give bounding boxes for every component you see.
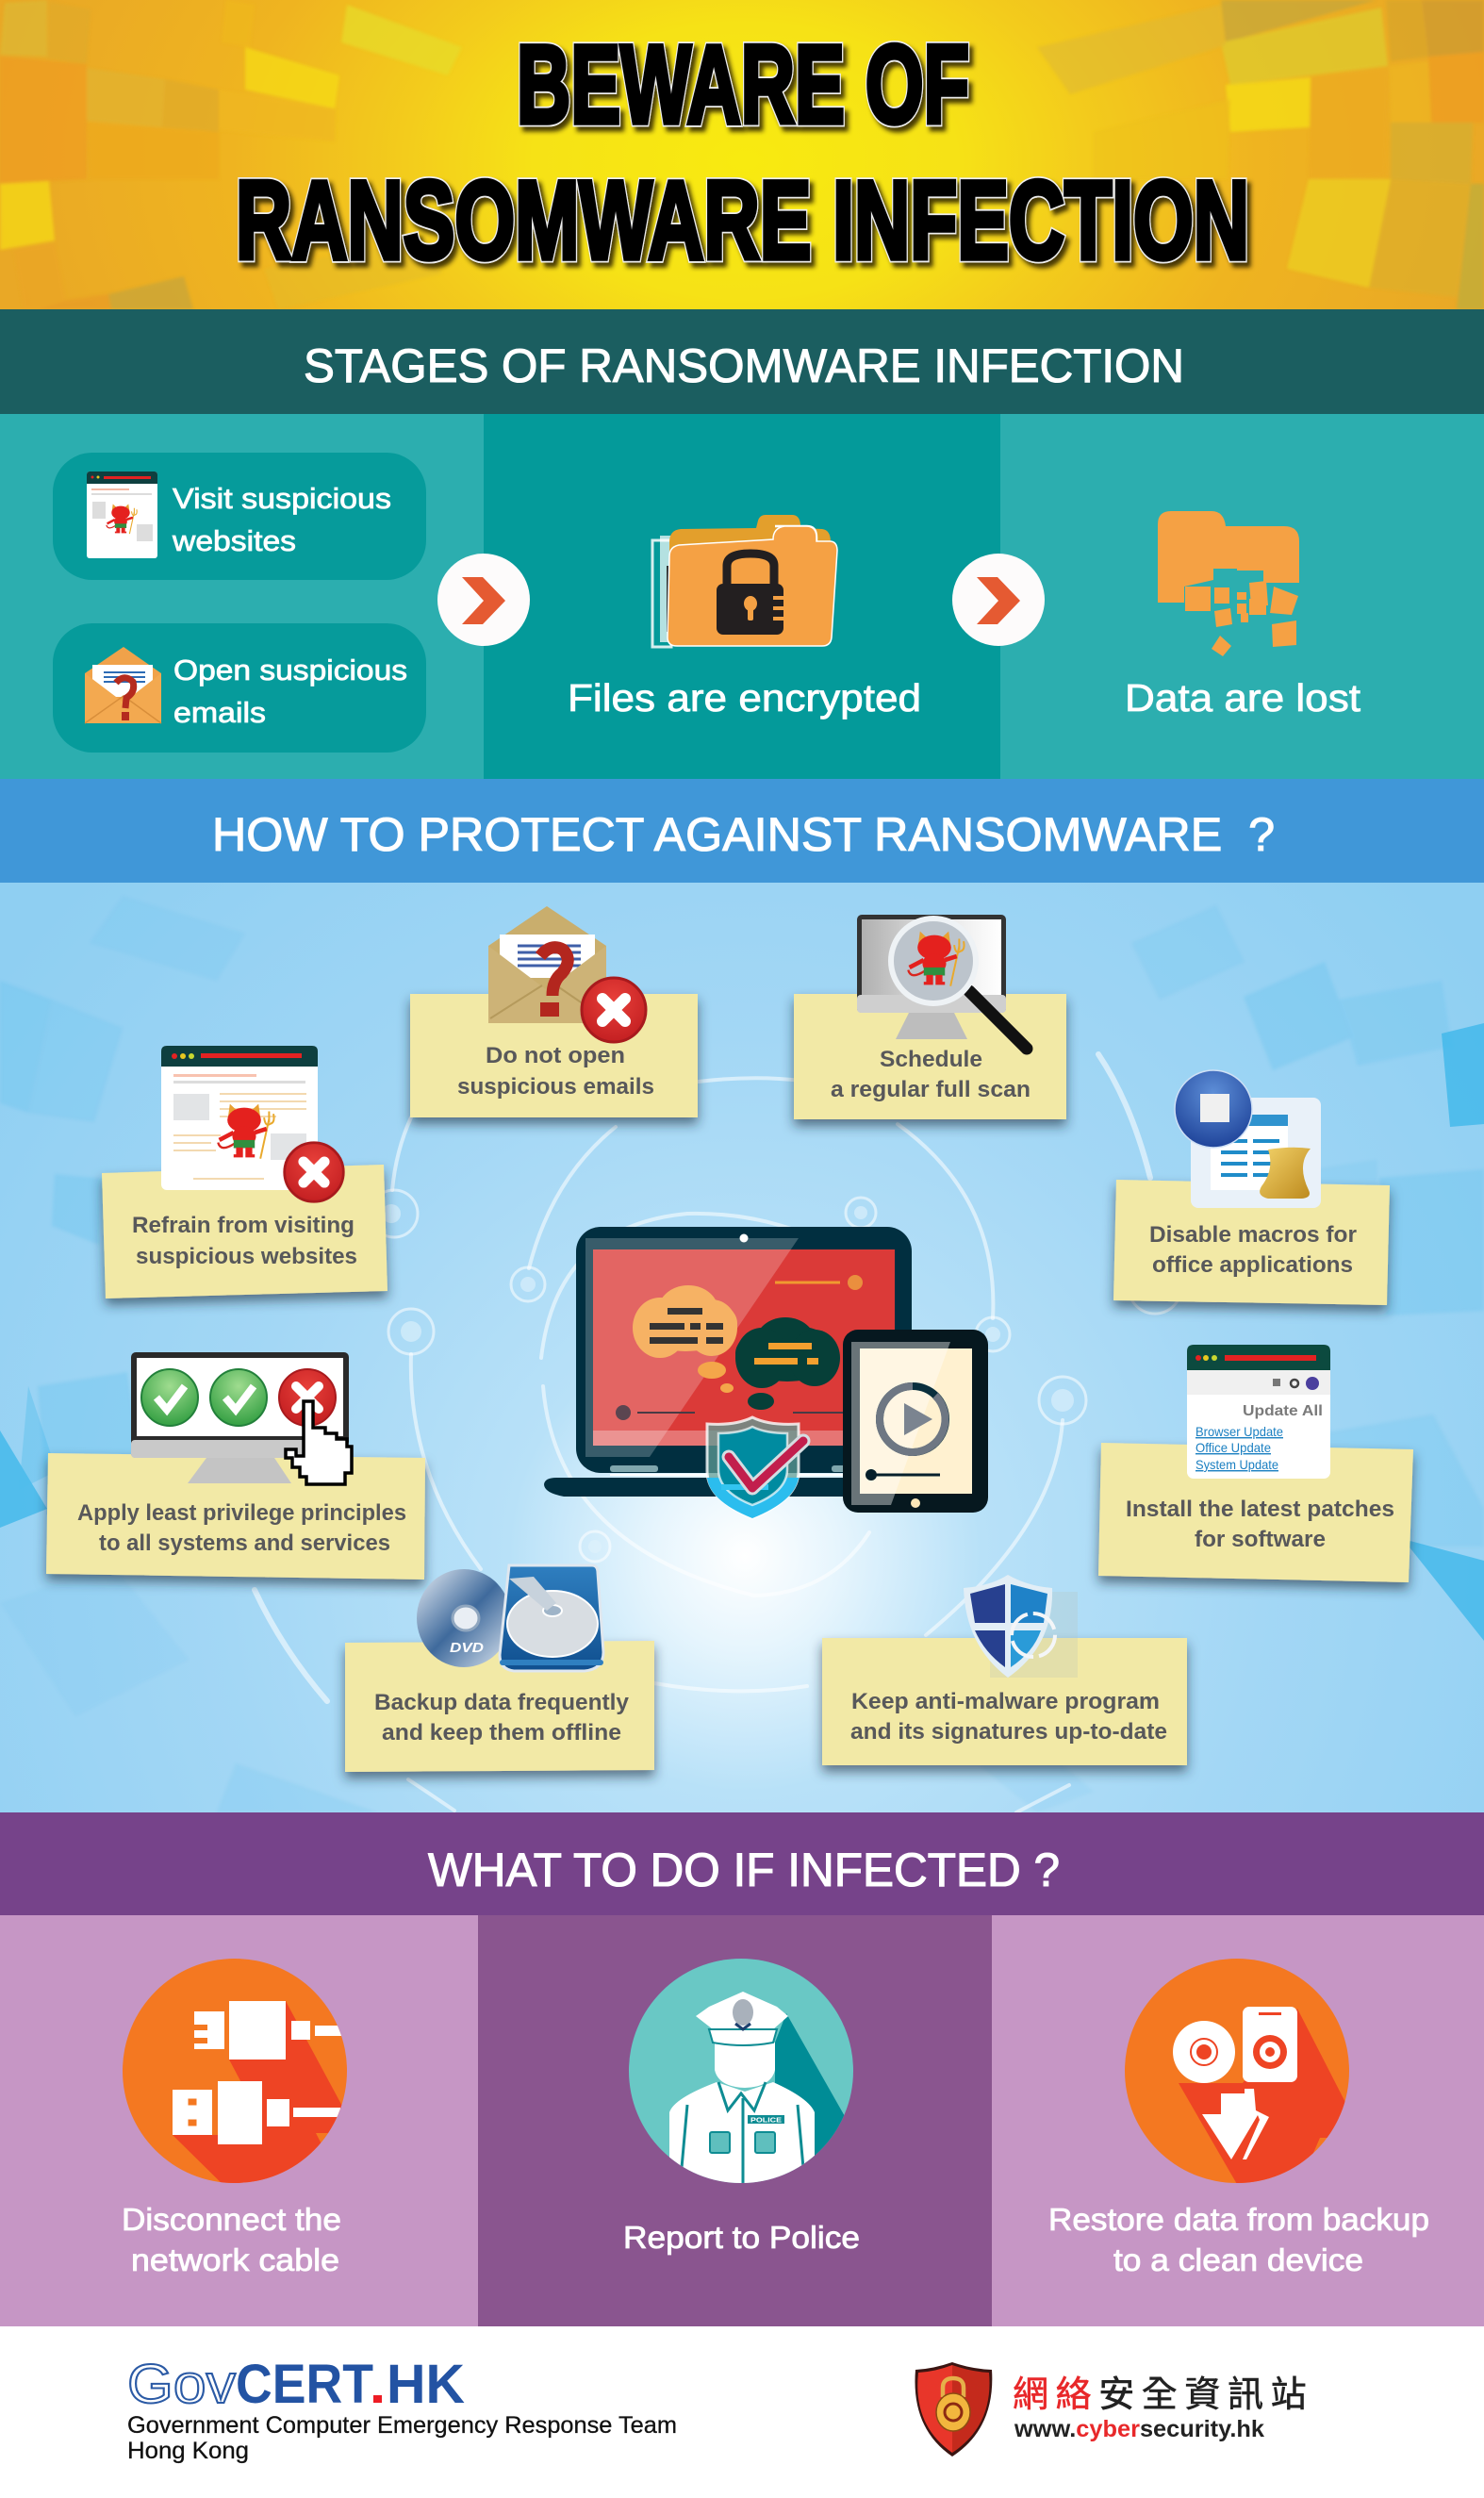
- logo: GovCERT.HK: Gov: [127, 2354, 236, 2415]
- icon: police officer: [629, 1959, 853, 2188]
- icon: restore from backup: [1125, 1959, 1353, 2197]
- card: anti-malware: [822, 1575, 1187, 1765]
- card: anti-malware: Keep anti-malware program: [851, 1689, 1160, 1714]
- icon: update window: Update All: [1243, 1403, 1323, 1419]
- icon: update window: [1187, 1345, 1330, 1479]
- pill: open suspicious emails: Open suspicious: [173, 653, 407, 687]
- icon: encrypted folder: [652, 515, 837, 647]
- icon: shield with refresh: [964, 1575, 1078, 1678]
- laptop: [544, 1227, 912, 1497]
- icon: data lost folder: [1158, 511, 1299, 656]
- label: disconnect: Disconnect the: [122, 2202, 341, 2237]
- arrow: stage 2 to 3: [952, 554, 1045, 646]
- icon: dvd and hard drive: DVD: [450, 1640, 484, 1656]
- icon: update window: Office Update: [1195, 1440, 1271, 1455]
- icon: red shield with lock: [915, 2362, 992, 2457]
- card: backup data: [345, 1565, 654, 1772]
- icon: monitor with magnifier: [857, 915, 1027, 1049]
- title: BEWARE OF: [517, 23, 969, 147]
- logo: GovCERT.HK: HK: [387, 2354, 465, 2415]
- pill: visit suspicious websites: Visit suspicious: [173, 482, 391, 515]
- label: restore data: to a clean device: [1113, 2242, 1363, 2277]
- section heading: protect: [0, 779, 1484, 883]
- card: anti-malware: and its signatures up-to-date: [850, 1719, 1167, 1745]
- card: do not open suspicious emails: [410, 906, 698, 1117]
- label: report to police: Report to Police: [623, 2220, 860, 2255]
- footer: GovCERT logo and text: [127, 2354, 677, 2464]
- icon: police officer: POLICE: [750, 2118, 782, 2124]
- section heading: stages: STAGES OF RANSOMWARE INFECTION: [304, 339, 1184, 392]
- footer: cybersecurity.hk logo: www.cybersecurity.hk: [1014, 2416, 1264, 2442]
- panel: protection background: [0, 883, 1484, 1812]
- card: apply least privilege: to all systems and services: [99, 1530, 390, 1556]
- panel: what to do if infected: [0, 1915, 1484, 2326]
- pill: visit suspicious websites: [53, 453, 426, 580]
- card: schedule a regular full scan: a regular full scan: [831, 1077, 1031, 1102]
- arrow: stage 1 to 2: [437, 554, 530, 646]
- icon: disconnect cable: [123, 1959, 351, 2197]
- card: schedule a regular full scan: Schedule: [880, 1047, 982, 1072]
- footer: cybersecurity.hk logo: [915, 2362, 1313, 2457]
- speech bubble: dark: [735, 1317, 840, 1410]
- section heading: protect: HOW TO PROTECT AGAINST RANSOMWARE ?: [212, 808, 1275, 861]
- label: restore data: Restore data from backup: [1048, 2202, 1429, 2237]
- title: BEWARE OF: [517, 23, 969, 147]
- card: backup data: Backup data frequently: [374, 1690, 630, 1715]
- card: apply least privilege: [46, 1352, 425, 1580]
- icon: monitor with checks: [131, 1352, 352, 1484]
- tablet: [843, 1330, 988, 1513]
- card: refrain from visiting suspicious websites: suspicious websites: [136, 1244, 357, 1269]
- icon: macro document: [1175, 1070, 1321, 1208]
- speech bubble: orange: [633, 1285, 737, 1393]
- logo: GovCERT.HK: CERT: [236, 2354, 373, 2415]
- card: disable macros: office applications: [1152, 1252, 1353, 1278]
- icon: suspicious email: [488, 906, 646, 1042]
- card: disable macros: [1113, 1070, 1390, 1305]
- card: schedule a regular full scan: [794, 915, 1066, 1119]
- icon: update window: System Update: [1195, 1457, 1278, 1472]
- logo: GovCERT.HK: [127, 2354, 465, 2415]
- label: disconnect: [122, 2202, 341, 2277]
- panel: stages of infection: [0, 414, 1484, 779]
- pill: open suspicious emails: [53, 623, 426, 753]
- card: backup data: and keep them offline: [382, 1720, 621, 1745]
- label: restore data: [1048, 2202, 1429, 2277]
- card: refrain from visiting suspicious websites: Refrain from visiting: [132, 1213, 355, 1238]
- header banner background: [0, 0, 1484, 309]
- card: disable macros: Disable macros for: [1149, 1222, 1357, 1248]
- pill: open suspicious emails: emails: [173, 696, 266, 729]
- card: do not open suspicious emails: suspicious emails: [457, 1074, 654, 1100]
- section heading: if infected: WHAT TO DO IF INFECTED ?: [428, 1844, 1060, 1896]
- card: refrain from visiting suspicious websites: [102, 1046, 387, 1299]
- section heading: stages: [0, 309, 1484, 414]
- pill: visit suspicious websites: websites: [172, 524, 296, 557]
- card: install patches: Install the latest patches: [1126, 1497, 1394, 1522]
- label: files are encrypted: Files are encrypted: [568, 676, 921, 720]
- card: apply least privilege: Apply least privilege principles: [77, 1500, 406, 1526]
- label: disconnect: network cable: [131, 2242, 339, 2277]
- card: do not open suspicious emails: Do not open: [486, 1043, 625, 1068]
- shield with check mark: [707, 1417, 803, 1518]
- label: data are lost: Data are lost: [1125, 676, 1361, 720]
- icon: malicious website: [161, 1046, 343, 1201]
- section heading: if infected: [0, 1812, 1484, 1915]
- card: install patches: [1098, 1345, 1413, 1582]
- footer: GovCERT logo and text: Government Computer Emergency Response Team: [127, 2412, 677, 2439]
- title: [236, 23, 1249, 283]
- footer: cybersecurity.hk logo: 網絡安全資訊站: [1013, 2375, 1313, 2415]
- icon: update window: Browser Update: [1195, 1424, 1283, 1439]
- footer: GovCERT logo and text: Hong Kong: [127, 2438, 249, 2464]
- card: install patches: for software: [1195, 1527, 1326, 1552]
- icon: dvd and hard drive: [417, 1565, 603, 1671]
- illustration: laptop, tablet and shield: [544, 1227, 988, 1518]
